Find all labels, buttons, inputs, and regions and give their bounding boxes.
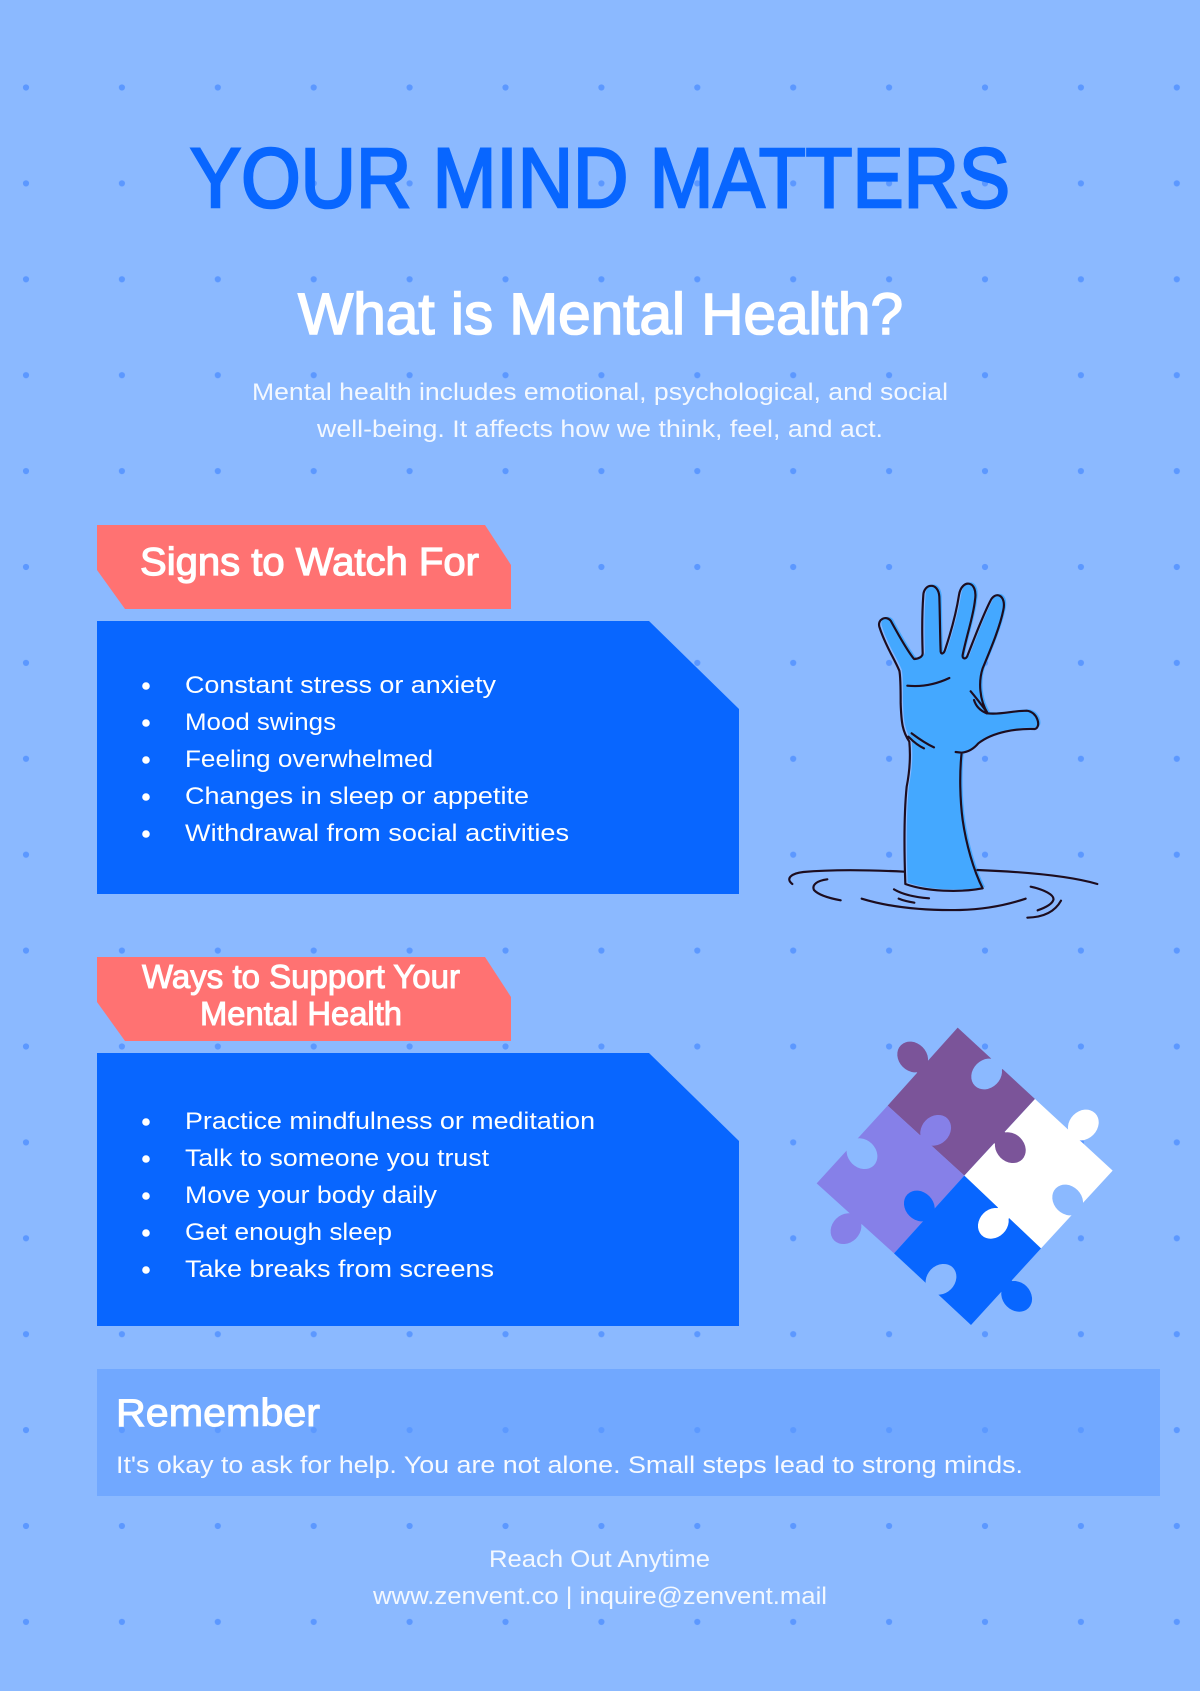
list: ways: Talk to someone you trust <box>185 1145 489 1172</box>
icon: raised hand in water <box>789 582 1097 918</box>
banner: ways to support: Mental Health <box>200 995 402 1032</box>
intro text: well-being. It affects how we think, feel, and act. <box>316 416 883 443</box>
intro text: Mental health includes emotional, psychological, and social <box>252 379 948 406</box>
intro text <box>252 379 948 443</box>
list: signs: Constant stress or anxiety <box>185 672 496 699</box>
callout heading: Remember <box>116 1392 320 1435</box>
footer: contact <box>372 1546 827 1610</box>
panel: signs to watch for <box>97 525 739 894</box>
banner: signs to watch for <box>97 525 511 609</box>
list: ways: Move your body daily <box>185 1182 437 1209</box>
list: ways <box>97 1053 739 1326</box>
icon: puzzle pieces <box>817 1028 1113 1325</box>
list: ways: Practice mindfulness or meditation <box>185 1108 595 1135</box>
panel: ways to support your mental health <box>97 957 739 1326</box>
callout text: It's okay to ask for help. You are not alone. Small steps lead to strong minds. <box>116 1452 1023 1479</box>
banner: ways to support <box>97 957 511 1041</box>
list: signs: Mood swings <box>185 709 336 736</box>
list: signs: Changes in sleep or appetite <box>185 783 529 810</box>
list: ways: Take breaks from screens <box>185 1256 494 1283</box>
list: ways: Get enough sleep <box>185 1219 392 1246</box>
callout: remember <box>97 1369 1160 1496</box>
footer: contact: Reach Out Anytime <box>489 1546 710 1573</box>
footer: contact: www.zenvent.co | inquire@zenvent.mail <box>372 1583 827 1610</box>
banner: signs to watch for: Signs to Watch For <box>140 541 479 584</box>
banner: ways to support: Ways to Support Your <box>142 958 460 995</box>
list: signs: Feeling overwhelmed <box>185 746 433 773</box>
list: signs <box>97 621 739 894</box>
list: signs: Withdrawal from social activities <box>185 820 569 847</box>
heading: what is mental health: What is Mental Health? <box>298 282 903 347</box>
title: YOUR MIND MATTERS <box>190 131 1010 225</box>
